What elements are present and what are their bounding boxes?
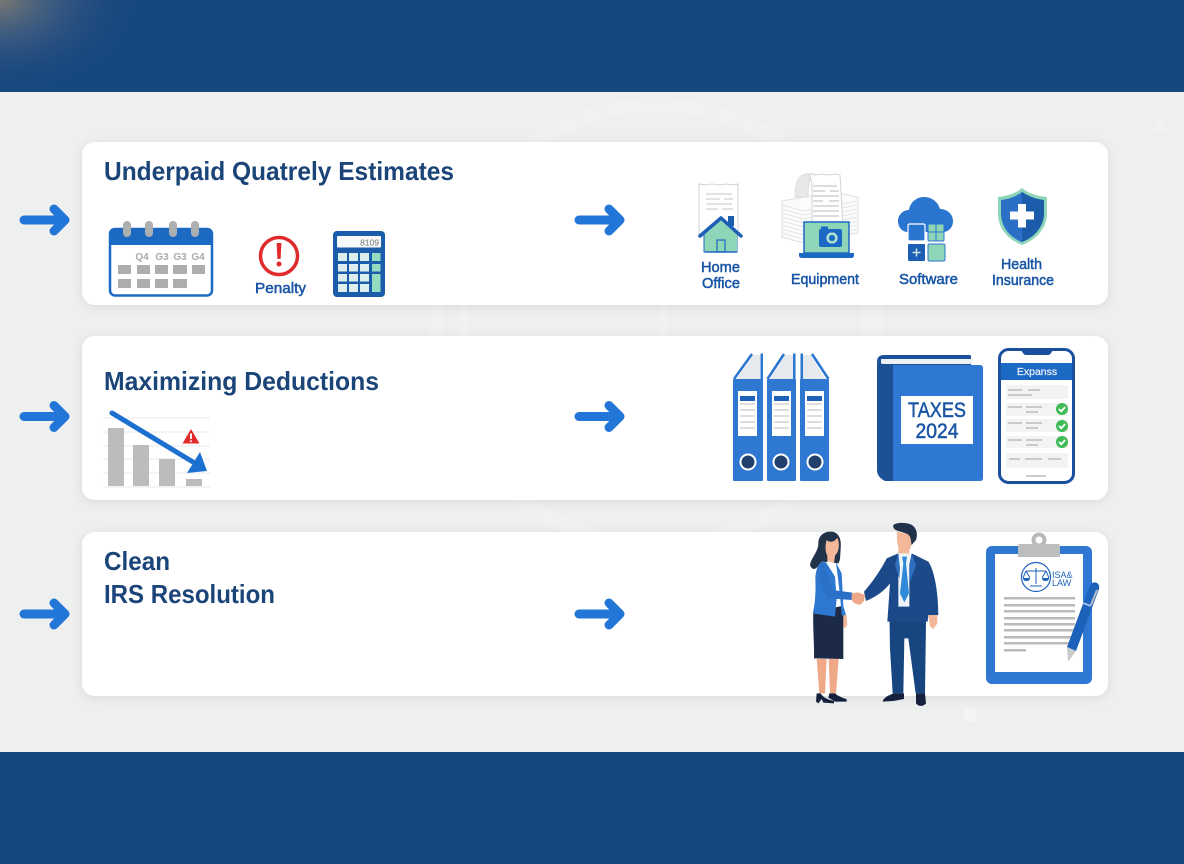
illustration: woman in blue suit <box>810 532 852 703</box>
icon: binders <box>733 354 829 481</box>
icon: quarterly calendar: G3 <box>173 252 187 263</box>
heading: clean IRS resolution: Clean <box>104 546 170 576</box>
heading: clean IRS resolution: IRS Resolution <box>104 579 275 609</box>
page background <box>0 92 1184 752</box>
heading: underpaid estimates: Underpaid Quatrely Estimates <box>104 156 454 186</box>
chart: falling bars with arrow <box>103 413 210 487</box>
icon: quarterly calendar: G4 <box>191 252 205 263</box>
label: expense header: Expanss <box>1017 366 1057 378</box>
logo: scales of justice: LAW <box>1052 578 1072 588</box>
icon: quarterly calendar <box>109 221 213 296</box>
label: penalty: Penalty <box>255 281 307 297</box>
label: software: Software <box>899 272 958 288</box>
icon: pen <box>1067 582 1099 662</box>
label: health insurance: Insurance <box>992 273 1054 289</box>
label: home office: Office <box>702 276 740 292</box>
label: taxes 2024: TAXES <box>908 399 966 422</box>
logo: scales of justice: ISA& <box>1052 570 1073 580</box>
heading: clean IRS resolution <box>104 546 275 609</box>
label: home office <box>701 260 740 292</box>
icon: expense tracking phone <box>1000 349 1074 482</box>
label: health insurance <box>992 257 1054 289</box>
footer band <box>0 752 1184 864</box>
icon: equipment receipts and laptop <box>782 174 859 288</box>
icon: software cloud <box>898 197 958 288</box>
illustration: man in navy suit <box>864 523 938 706</box>
icon: calculator: 8109 <box>360 238 379 248</box>
panel: maximizing deductions <box>82 336 1108 500</box>
panel: underpaid quarterly estimates <box>82 142 1108 305</box>
icon: calculator <box>333 231 385 297</box>
arrow: row one <box>24 209 65 231</box>
label: taxes 2024 <box>908 399 966 443</box>
icon: home office <box>699 184 741 292</box>
arrow: to deduction records <box>579 406 620 428</box>
binder three <box>800 354 829 481</box>
label: home office: Home <box>701 260 740 276</box>
icon: taxes 2024 book <box>877 355 983 481</box>
arrow: to deductions icons <box>579 209 620 231</box>
arrow: row three <box>24 603 65 625</box>
arrow: to resolution illustration <box>579 603 620 625</box>
arrow: row two <box>24 406 65 428</box>
icon: handshake <box>852 592 865 605</box>
header band <box>0 0 1184 92</box>
icon: penalty alert <box>255 238 307 297</box>
icon: quarterly calendar: G3 <box>155 252 169 263</box>
label: taxes 2024: 2024 <box>916 420 959 443</box>
icon: health insurance shield <box>992 188 1054 289</box>
label: health insurance: Health <box>1001 257 1042 273</box>
panel: clean IRS resolution <box>82 523 1108 706</box>
heading: maximizing deductions: Maximizing Deductions <box>104 366 379 396</box>
logo: scales of justice <box>1022 562 1073 592</box>
icon: quarterly calendar: Q4 <box>135 252 149 263</box>
icon: legal clipboard <box>986 534 1099 684</box>
label: equipment: Equipment <box>791 272 859 288</box>
binder two <box>767 354 796 481</box>
binder one <box>733 354 763 481</box>
